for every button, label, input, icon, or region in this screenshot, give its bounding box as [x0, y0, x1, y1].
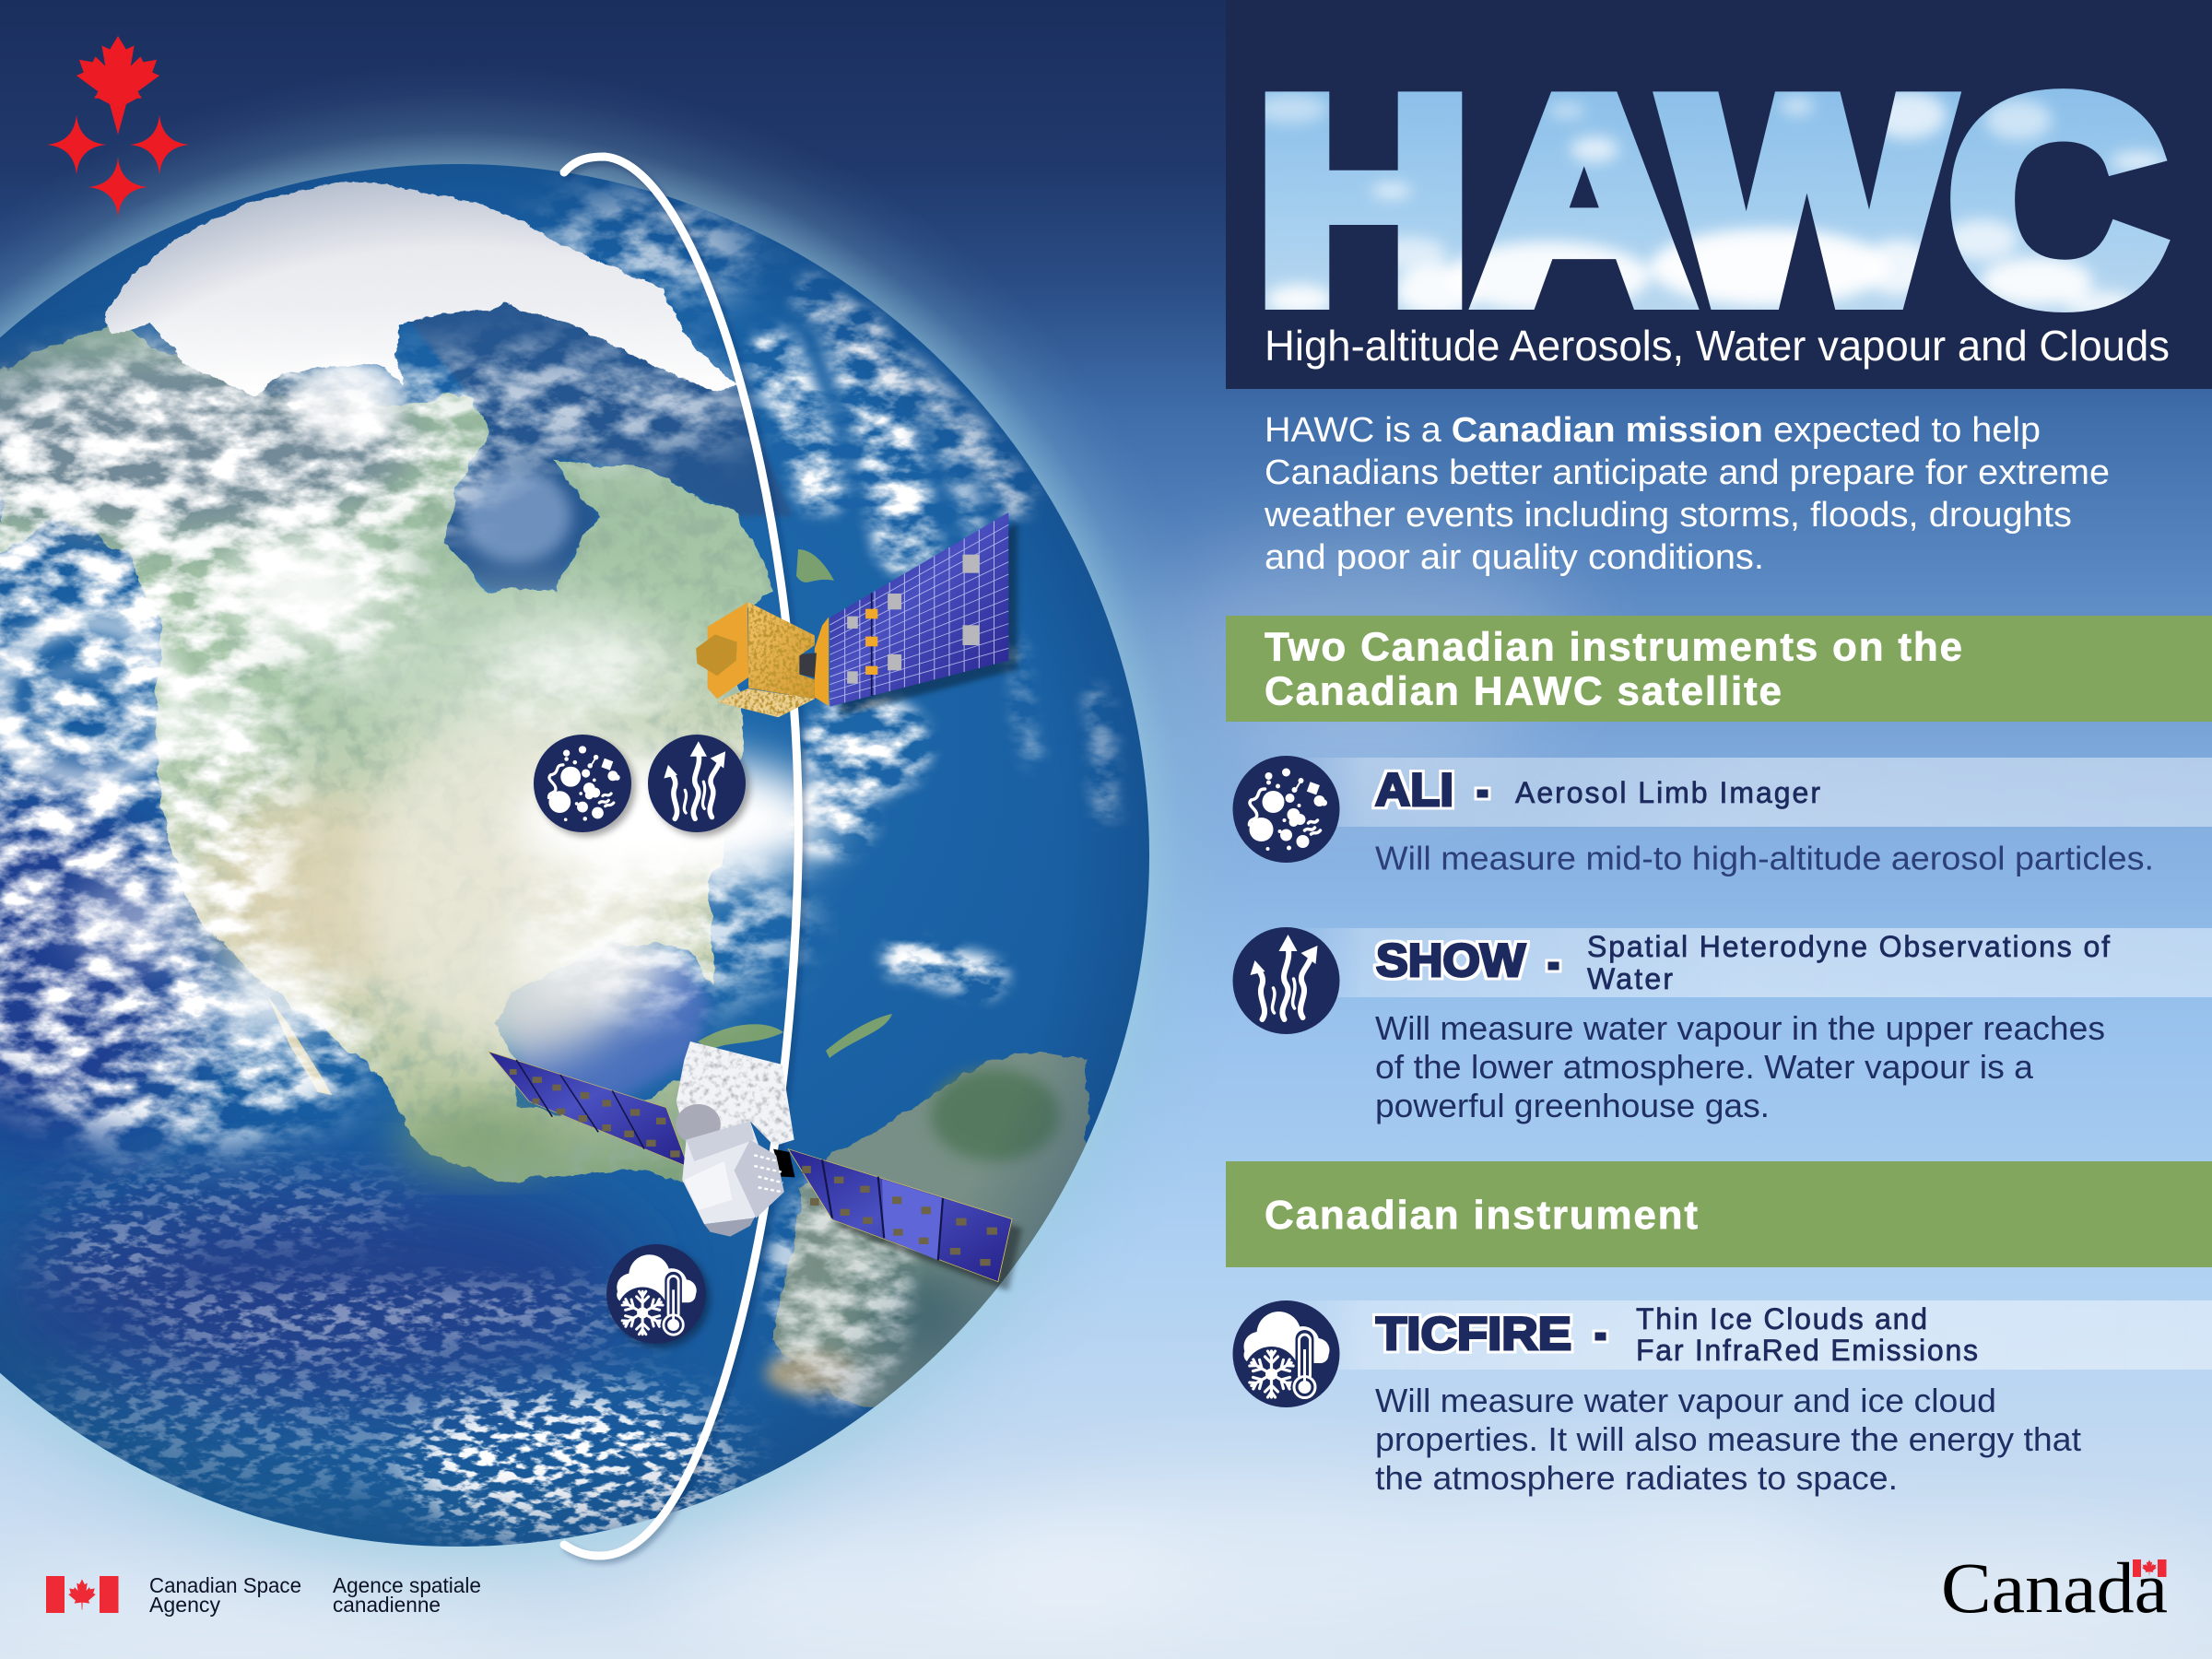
text block: mission introduction: HAWC is a Canadian mission expected to help [1265, 411, 2041, 450]
right wing shadow [798, 1159, 1022, 1291]
antenna dish [676, 1104, 721, 1145]
logo: Canadian flag and Canadian Space Agency signature [46, 1573, 481, 1617]
TICFIRE name band [1290, 1300, 2212, 1370]
panel: title banner [1226, 0, 2212, 389]
icon: CSA logo, maple leaf and stars [46, 36, 190, 218]
TICFIRE full name [1636, 1302, 1978, 1367]
Hudson Bay clouds [461, 470, 571, 562]
logo: Canadian flag and Canadian Space Agency signature: Agency [149, 1593, 220, 1617]
text block: mission introduction: Canadians better anticipate and prepare for extreme [1265, 453, 2110, 492]
Arctic ice cap [103, 182, 737, 395]
deep ocean tint, west [0, 783, 203, 1152]
Mexico green [396, 1107, 562, 1170]
deep ocean tint, south west [0, 1180, 645, 1401]
SHOW description: of the lower atmosphere. Water vapour is a [1375, 1048, 2034, 1086]
Baja California [267, 995, 332, 1095]
title: HAWC letters with sky fill: HAWC [1255, 41, 2165, 361]
silver foil instrument block [677, 1041, 794, 1146]
TICFIRE description [1375, 1382, 2081, 1497]
TICFIRE description: properties. It will also measure the energy that [1375, 1420, 2081, 1458]
SHOW acronym: SHOW [1376, 935, 1526, 986]
Gulf of Mexico [512, 949, 710, 1111]
icon: ice clouds [1233, 1300, 1340, 1407]
pale mid continent [359, 710, 673, 1060]
SHOW full name: Water [1587, 962, 1673, 995]
Caribbean islands [698, 549, 892, 1058]
icon: water vapour [1233, 927, 1340, 1034]
icon on globe: ice clouds [606, 1244, 706, 1344]
illustration: TICFIRE satellite [488, 1041, 1022, 1291]
ALI full name: Aerosol Limb Imager [1515, 776, 1820, 809]
TICFIRE description: Will measure water vapour and ice cloud [1375, 1382, 1996, 1419]
text block: mission introduction: and poor air quality conditions. [1265, 538, 1764, 577]
ALI name band [1290, 758, 2212, 827]
scattered southern clouds [0, 1152, 1005, 1558]
icon on globe: aerosol particles [534, 735, 631, 832]
South America [771, 1051, 1088, 1410]
solar panel [830, 512, 1008, 707]
SHOW full name: Spatial Heterodyne Observations of [1587, 930, 2110, 963]
atmosphere glow around the Earth [0, 63, 1251, 1648]
SHOW description: Will measure water vapour in the upper reaches [1375, 1009, 2105, 1047]
heading band: Canadian instrument [1226, 1161, 2212, 1267]
left solar wing [488, 1052, 688, 1167]
heading band: Canadian instrument: Canadian instrument [1265, 1193, 1698, 1238]
logo: Canadian flag and Canadian Space Agency signature: Agence spatiale [333, 1573, 481, 1597]
cloud cover over the continent [138, 461, 839, 1124]
orbit line around Earth [564, 157, 802, 1559]
panel: ALI instrument [1233, 756, 2212, 877]
ocean [0, 157, 1171, 1558]
TICFIRE full name: Far InfraRed Emissions [1636, 1334, 1978, 1367]
northern South America forest [931, 1069, 1060, 1161]
Labrador sea region [410, 302, 792, 590]
TICFIRE acronym: TICFIRE [1376, 1308, 1571, 1359]
Pacific clouds [0, 369, 636, 1382]
panel: TICFIRE instrument [1233, 1300, 2212, 1497]
SHOW description: powerful greenhouse gas. [1375, 1087, 1770, 1124]
SHOW description [1375, 1009, 2105, 1124]
illustration: HAWC satellite with gold foil [696, 512, 1018, 717]
text block: mission introduction: weather events including storms, floods, droughts [1264, 496, 2072, 535]
heading band: two Canadian instruments [1226, 616, 2212, 722]
connector [773, 1149, 795, 1177]
icon: aerosol particles [1233, 756, 1340, 863]
heading band: two Canadian instruments: Two Canadian instruments on the [1265, 625, 1962, 669]
ALI description: Will measure mid-to high-altitude aerosol particles. [1375, 839, 2154, 877]
gold body [696, 602, 829, 717]
storm swirl [0, 622, 175, 779]
spacecraft body [682, 1122, 784, 1237]
bright cloud mass [74, 539, 830, 1040]
solar panel shadow [840, 523, 1018, 716]
northern clouds over the Arctic [0, 157, 912, 673]
ALI acronym: ALI [1375, 764, 1453, 816]
SHOW name band [1290, 928, 2212, 997]
logo: Canadian flag and Canadian Space Agency signature: canadienne [333, 1593, 441, 1617]
panel: Earth globe [0, 157, 1171, 1558]
heading band: two Canadian instruments: Canadian HAWC satellite [1265, 669, 1782, 713]
tan south west US [203, 793, 424, 995]
pale central haze [332, 581, 700, 747]
dash [1476, 788, 1489, 799]
logo: Canada wordmark: Canada [1941, 1547, 2168, 1628]
TICFIRE full name: Thin Ice Clouds and [1636, 1302, 1927, 1335]
dash [1594, 1331, 1607, 1342]
text block: mission introduction [1264, 411, 2110, 577]
limb shading [0, 164, 1149, 1547]
icon on globe: rising water vapour [648, 735, 746, 832]
SHOW full name [1587, 930, 2110, 995]
Atlantic clouds [719, 258, 1143, 1456]
grey northern territories [0, 350, 415, 535]
subtitle: High-altitude Aerosols, Water vapour and Clouds [1265, 322, 2170, 370]
panel: SHOW instrument [1233, 927, 2212, 1124]
dash [1547, 960, 1560, 971]
southern desert coast [765, 1351, 857, 1395]
TICFIRE description: the atmosphere radiates to space. [1375, 1459, 1898, 1497]
North America landmass [0, 313, 793, 1207]
right solar wing [788, 1149, 1012, 1282]
logo: Canadian flag and Canadian Space Agency signature: Canadian Space [149, 1573, 301, 1597]
Amazon dark forest [857, 1263, 968, 1355]
broken ice below the cap [295, 359, 406, 442]
